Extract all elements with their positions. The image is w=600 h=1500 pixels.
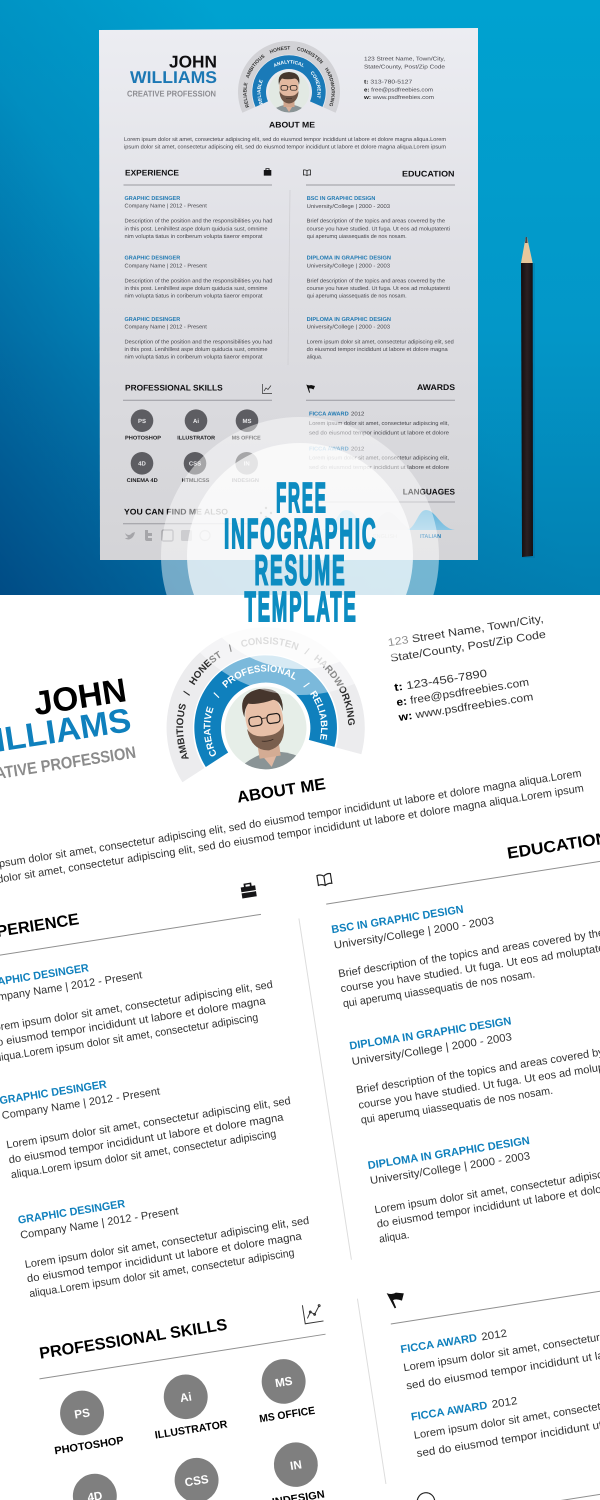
contact details [384,614,557,725]
icon: clock [416,1491,436,1500]
panel: experience: GRAPHIC DESINGER [124,196,180,202]
icon: book [304,170,310,176]
contact details: t: 313-780-5127 [364,80,412,86]
panel: experience: Description of the position and the responsibilities you had [124,340,272,346]
skill: HTML/CSS: HTML/CSS [182,478,210,484]
name block: WILLIAMS [130,68,217,87]
education heading: EDUCATION [506,829,600,863]
panel: education: course you have studied. Ut fuga. Ut eos ad moluptatenti [307,286,450,292]
contact details: t: 123-456-7890 [394,669,488,695]
skill: Cinema 4D: CINEMA 4D [127,478,158,484]
panel: experience: GRAPHIC DESINGER [124,256,180,262]
skill: Cinema 4D: 4D [138,461,147,468]
panel: awards: 2012 [351,446,364,452]
name block: JOHN [169,53,217,72]
panel: experience [0,882,315,1302]
skills arc badge with photo: HARDWORKING [325,68,335,106]
panel: education: Brief description of the topics and areas covered by the [307,278,445,284]
panel: experience: aliqua.Lorem ipsum dolor sit amet, consectetur adipiscing [29,1248,295,1301]
panel: education: Brief description of the topics and areas covered by the [338,928,600,981]
icon: line chart [262,384,272,394]
panel: education: aliqua. [378,1230,411,1247]
panel: languages: ITALIAN [420,534,441,540]
skill: MS Office [251,1355,317,1426]
skill: Illustrator [177,409,215,441]
panel: professional skills [123,383,272,484]
experience heading: EXPERIENCE [125,169,180,178]
title: FREE [276,474,328,521]
translucent inner circle [187,443,413,669]
skills arc badge with photo: CONSISTEN [297,47,324,64]
contact details [363,57,446,101]
skills arc badge with photo: / [304,648,310,654]
skills arc badge with photo: RELIABLE [243,82,250,108]
panel: education [304,170,455,361]
about me text: Lorem ipsum dolor sit amet, consectetur adipiscing elit, sed do eiusmod tempor incididunt ut labore et dolore magna aliqua.Lorem [124,137,446,143]
resume content (photographed) [123,41,456,542]
title: RESUME [254,546,346,594]
skill: Photoshop [46,1385,125,1458]
panel: education: DIPLOMA IN GRAPHIC DESIGN [349,1017,512,1054]
skills arc badge with photo: HONEST [270,46,290,54]
panel: awards: Lorem ipsum dolor sit amet, consectetur adipiscing elit, [309,456,449,462]
skill: InDesign [232,452,259,484]
panel: awards: FICCA AWARD [309,446,349,452]
panel: experience: nim volupta tiatus in coriberum volupta tiaeror emporat [124,294,263,300]
skill: MS Office [232,409,261,441]
skill: MS Office: MS OFFICE [259,1406,317,1426]
panel: education: DIPLOMA IN GRAPHIC DESIGN [307,256,391,262]
skill: MS Office: MS [242,418,252,425]
panel: education: Brief description of the topics and areas covered by the [307,219,445,225]
skill: Illustrator: ILLUSTRATOR [177,435,215,441]
panel: social links: YOU CAN FIND ME ALSO [124,507,229,516]
skills arc badge with photo: / [229,644,232,652]
panel: education: do eiusmod tempor incididunt ut labore et dolore magna [307,347,449,353]
panel: experience: nim volupta tiatus in coriberum volupta tiaeror emporat [124,234,263,240]
skills arc badge with photo: AMBITIOUS [176,704,189,759]
skills arc badge with photo: RELIABLE [310,690,328,740]
portrait photo [268,71,310,114]
skill: InDesign [264,1439,326,1500]
skill: HTML/CSS [172,1455,222,1500]
skills arc badge with photo: / [303,682,310,688]
contact details: w: www.psdfreebies.com [363,95,434,101]
translucent outer circle [161,417,439,695]
contact details: w: www.psdfreebies.com [396,692,535,725]
skill: Illustrator [146,1369,229,1443]
panel: education: BSC IN GRAPHIC DESIGN [307,196,375,202]
text: INFOGRAPHIC [224,510,378,557]
panel: experience: in this post. Lenihillest aspe dolum quiducia sust, omnime [124,286,268,292]
contact details: 123 Street Name, Town/City, [364,57,446,63]
panel: education: DIPLOMA IN GRAPHIC DESIGN [367,1136,531,1173]
skills arc badge with photo: CREATIVE [204,706,216,756]
panel: education: University/College | 2000 - 2003 [351,1032,513,1069]
panel: education: University/College | 2000 - 2003 [307,264,390,270]
name block: JOHN [31,672,129,723]
skills arc badge with photo: ANALYTICAL [274,60,304,68]
skills arc badge with photo: / [214,692,220,698]
skills arc badge with photo: / [183,690,190,696]
contact details: State/County, Post/Zip Code [390,630,547,666]
panel: experience: nim volupta tiatus in coriberum volupta tiaeror emporat [124,355,263,361]
skill: Cinema 4D [127,452,158,484]
panel: education: aliqua. [307,355,323,361]
panel: experience: Lorem ipsum dolor sit amet, consectetur adipiscing elit, sed [24,1216,310,1272]
skill: MS Office: MS [274,1375,294,1391]
panel: experience: do eiusmod tempor incididunt ut labore et dolore magna [8,1112,286,1167]
name block [127,53,217,99]
icon: briefcase [264,168,271,176]
panel: enlarged angled resume close-up [0,614,600,1500]
panel: experience [124,168,272,361]
panel: education: BSC IN GRAPHIC DESIGN [331,905,465,937]
skills arc badge with photo: HARDWORKING [314,654,355,726]
panel: awards [386,1248,600,1462]
language curves [322,510,455,530]
panel: education: course you have studied. Ut fuga. Ut eos ad moluptatenti [340,941,600,996]
name block: CREATIVE PROFESSION [127,89,216,99]
panel: education [317,829,600,1248]
panel: experience: aliqua.Lorem ipsum dolor sit amet, consectetur adipiscing [10,1129,277,1182]
panel: awards [306,383,456,471]
panel: education: qui aperumq uiassequatis de nos nosam. [342,969,537,1011]
panel: experience: aliqua.Lorem ipsum dolor sit amet, consectetur adipiscing [0,1013,259,1066]
panel: education: University/College | 2000 - 2003 [333,916,495,953]
skills arc badge with photo: CONSISTEN [241,637,299,650]
paper sheet [99,28,478,560]
panel: experience: GRAPHIC DESINGER [0,1080,108,1108]
skill: HTML/CSS [182,452,210,484]
panel: awards: 2012 [351,412,364,418]
contact details: e: free@psdfreebies.com [396,677,531,710]
panel: awards: sed do eiusmod tempor incididunt ut labore et dolore [309,465,449,471]
icon: flag [387,1290,406,1309]
skills arc badge with photo [238,41,340,112]
title: TEMPLATE [244,583,358,630]
skill: Photoshop: PHOTOSHOP [125,435,161,441]
panel: education: course you have studied. Ut fuga. Ut eos ad moluptatenti [307,226,450,232]
panel: education: Lorem ipsum dolor sit amet, consectetur adipiscing elit, sed [307,340,454,346]
panel: education: University/College | 2000 - 2003 [307,325,390,331]
skill: MS Office: MS OFFICE [232,435,261,441]
about me heading: ABOUT ME [269,120,316,129]
icon: flag [306,384,315,393]
panel: education: University/College | 2000 - 2003 [369,1151,531,1188]
skill: Photoshop: PS [138,418,146,425]
skills heading: PROFESSIONAL SKILLS [125,383,223,392]
about me heading: ABOUT ME [236,775,328,807]
panel: experience: Company Name | 2012 - Present [1,1086,162,1123]
panel: experience: GRAPHIC DESINGER [17,1199,126,1228]
panel: education: qui aperumq uiassequatis de nos nosam. [307,234,407,240]
skills arc badge with photo: COHERENT [310,71,321,98]
panel: experience: GRAPHIC DESINGER [124,317,180,323]
skills arc badge with photo: PROFESSIONAL [222,664,296,688]
skill: InDesign: INDESIGN [232,478,259,484]
skill: InDesign: IN [289,1458,303,1474]
panel: languages [306,488,456,540]
pencil [521,237,535,558]
panel: experience: in this post. Lenihillest aspe dolum quiducia sust, omnime [124,347,268,353]
icon: book [317,873,332,887]
panel: education: University/College | 2000 - 2003 [307,204,390,210]
skill: Illustrator: Ai [193,418,199,425]
icon: network dots [260,507,272,518]
panel: education: qui aperumq uiassequatis de nos nosam. [307,294,407,300]
blue desk background [0,0,600,595]
panel: social links [123,507,272,541]
social icons [125,530,210,541]
panel: experience: Company Name | 2012 - Present [124,263,207,269]
skill: Photoshop [125,409,161,441]
contact details: 123 Street Name, Town/City, [387,614,546,650]
skills arc badge with photo: HONEST [188,650,220,686]
skill: Illustrator: ILLUSTRATOR [154,1420,229,1443]
contact details: e: free@psdfreebies.com [364,87,433,93]
panel: experience: in this post. Lenihillest aspe dolum quiducia sust, omnime [124,226,268,232]
icon: line chart [302,1302,323,1324]
panel: resume paper mockup [99,28,478,560]
panel: experience: Description of the position and the responsibilities you had [124,278,272,284]
skill: Photoshop: PHOTOSHOP [54,1436,125,1458]
skill: InDesign: IN [244,461,250,468]
education heading: EDUCATION [402,170,455,178]
panel: awards: sed do eiusmod tempor incididunt ut labore et dolore [309,430,449,436]
awards heading: AWARDS [417,383,456,392]
panel: awards: FICCA AWARD [309,412,349,418]
skill: HTML/CSS: CSS [189,461,201,468]
panel: experience: Lorem ipsum dolor sit amet, consectetur adipiscing elit, sed [6,1096,292,1152]
panel: awards: FICCA AWARD [400,1333,478,1357]
panel: experience: Company Name | 2012 - Present [20,1206,180,1243]
skill: Photoshop: PS [74,1406,91,1423]
about me text: ipsum dolor sit amet, consectetur adipiscing elit, sed do eiusmod tempor incididunt ut labore et dolore magna aliqua.Lorem ipsum [124,145,446,151]
icon: briefcase [240,882,257,898]
panel: professional skills [34,1301,351,1500]
panel: education: DIPLOMA IN GRAPHIC DESIGN [307,317,391,323]
panel: awards: Lorem ipsum dolor sit amet, consectetur adipiscing elit, [309,421,449,427]
panel: experience: Company Name | 2012 - Present [124,325,207,331]
contact details: State/County, Post/Zip Code [364,65,445,71]
skills arc badge with photo: AMBITIOUS [246,54,264,78]
skills arc badge with photo: RELIABLE [257,80,263,105]
skills heading: PROFESSIONAL SKILLS [38,1316,230,1363]
skill: Illustrator: Ai [179,1391,193,1406]
panel: languages: LANGUAGES [403,488,456,497]
panel: awards: 2012 [491,1396,518,1412]
skill: HTML/CSS: CSS [184,1473,210,1490]
name block [0,672,137,788]
portrait photo [225,686,306,770]
about me text [124,137,446,151]
panel: languages: ENGLISH [373,534,397,540]
panel: experience: Company Name | 2012 - Present [124,204,207,210]
title [224,474,378,630]
panel: experience: do eiusmod tempor incididunt ut labore et dolore magna [26,1231,305,1286]
skill: Cinema 4D [70,1471,120,1500]
panel: awards: 2012 [481,1329,508,1344]
panel: awards: FICCA AWARD [410,1401,488,1424]
panel: languages [416,1449,600,1500]
panel: experience: Description of the position and the responsibilities you had [124,219,272,225]
panel: education: qui aperumq uiassequatis de nos nosam. [360,1086,555,1128]
skills arc badge with photo [166,637,365,782]
